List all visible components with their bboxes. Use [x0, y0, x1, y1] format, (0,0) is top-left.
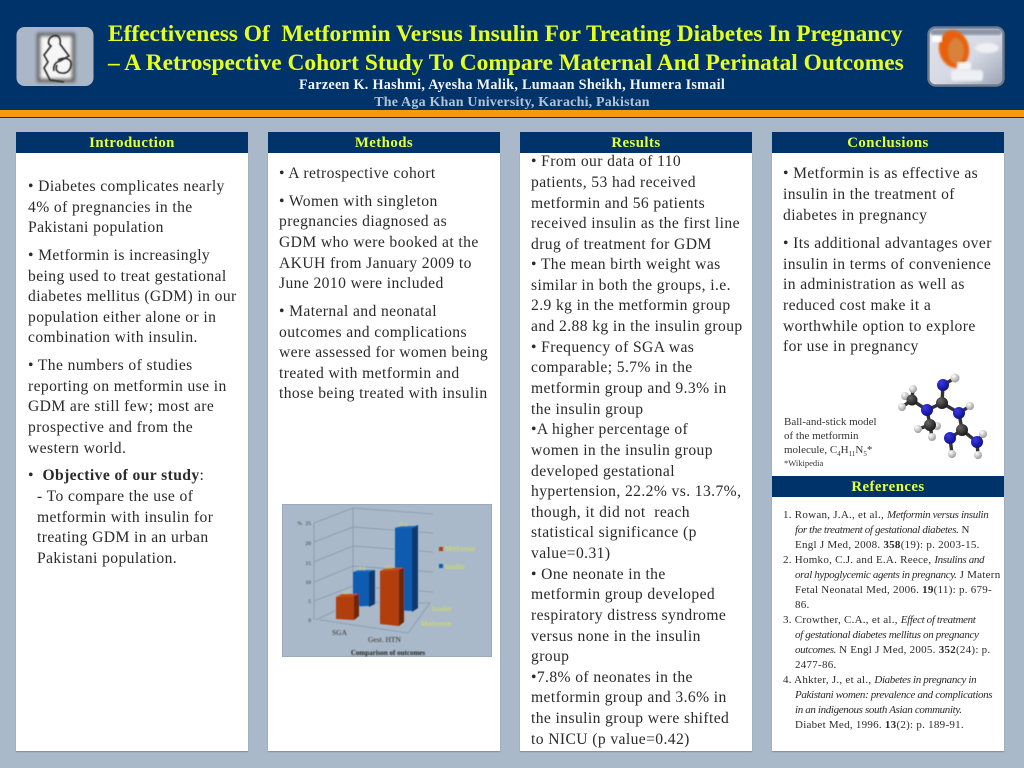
results text: women in the insulin group [531, 442, 713, 459]
methods text: were assessed for women being [279, 344, 488, 361]
introduction text: treating GDM in an urban [37, 529, 209, 546]
category labels: Gest. HTN [368, 635, 401, 644]
bar chart: comparison of outcomes [282, 504, 492, 657]
orange rule [0, 110, 1024, 117]
conclusions text: worthwhile option to explore [783, 318, 976, 335]
introduction heading: Introduction [89, 135, 175, 151]
references list: 3. Crowther, C.A., et al., Effect of treatment [783, 614, 975, 626]
introduction text: • Objective of our study: [28, 467, 204, 484]
references list: 4. Ahkter, J., et al., Diabetes in pregnancy in [783, 674, 976, 686]
references list: outcomes. N Engl J Med, 2005. 352(24): p. [795, 644, 990, 656]
value labels [343, 523, 408, 596]
introduction text: • The numbers of studies [28, 357, 193, 374]
introduction text: metformin with insulin for [37, 508, 213, 526]
introduction text: being used to treat gestational [28, 268, 227, 284]
results text: and 2.88 kg in the insulin group [531, 318, 743, 335]
introduction text: prospective and from the [28, 419, 193, 436]
panel: results [520, 132, 752, 752]
introduction text: diabetes mellitus (GDM) in our [28, 288, 237, 305]
results heading: Results [611, 135, 661, 151]
results text: the insulin group [531, 401, 643, 418]
title: Effectiveness Of Metformin Versus Insulin For Treating Diabetes In Pregnancy [108, 21, 902, 47]
results text: respiratory distress syndrome [531, 607, 726, 624]
legend: Insulin [445, 563, 465, 571]
results text: metformin group and 9.3% in [531, 380, 727, 397]
introduction text: reporting on metformin use in [28, 378, 227, 394]
axis labels: 5 [308, 599, 311, 605]
references body [772, 497, 1004, 751]
results text: 2.9 kg in the metformin group [531, 297, 731, 314]
references list [783, 509, 1000, 731]
results text: group [531, 648, 569, 665]
methods text: pregnancies diagnosed as [279, 213, 447, 230]
conclusions text [783, 165, 992, 355]
references list: 2. Homko, C.J. and E.A. Reece, Insulins and [783, 554, 984, 566]
legend: Metformin [421, 620, 452, 628]
molecule caption [784, 416, 877, 468]
methods text: • A retrospective cohort [279, 165, 436, 182]
introduction text: combination with insulin. [28, 329, 198, 346]
introduction body [16, 153, 248, 751]
icon: pill bottle [927, 26, 1005, 87]
results text: drug of treatment for GDM [531, 236, 712, 253]
value labels: 22.2 [399, 523, 408, 528]
axis labels: % [297, 521, 302, 527]
results text: metformin and 56 patients [531, 195, 705, 212]
header band [0, 0, 1024, 118]
methods text: • Women with singleton [279, 192, 438, 210]
methods body [268, 153, 500, 751]
results text: comparable; 5.7% in the [531, 359, 693, 376]
introduction text: - To compare the use of [37, 488, 193, 505]
references list: 2477-86. [795, 659, 836, 671]
results text: metformin group developed [531, 586, 715, 603]
panel: methods [268, 132, 500, 752]
methods text: • Maternal and neonatal [279, 303, 437, 320]
panel: conclusions [772, 132, 1004, 477]
introduction text: GDM are still few; most are [28, 398, 214, 415]
introduction text: Pakistani population. [37, 550, 177, 566]
introduction text: western world. [28, 440, 126, 456]
results text: though, it did not reach [531, 504, 690, 521]
results text: received insulin as the first line [531, 215, 740, 232]
axis labels [297, 521, 311, 624]
results text: •7.8% of neonates in the [531, 669, 693, 686]
introduction heading [16, 132, 248, 153]
references list: 86. [795, 599, 810, 611]
introduction text: • Diabetes complicates nearly [28, 178, 225, 195]
molecule caption: molecule, C4H11N5* [784, 444, 872, 459]
results text: • Frequency of SGA was [531, 339, 694, 356]
results text: hypertension, 22.2% vs. 13.7%, [531, 483, 741, 500]
conclusions text: insulin in the treatment of [783, 186, 955, 203]
methods text: outcomes and complications [279, 324, 467, 340]
chart title: Comparison of outcomes [351, 649, 425, 657]
introduction text: • Metformin is increasingly [28, 247, 210, 264]
references list: Diabet Med, 1996. 13(2): p. 189-91. [795, 719, 964, 731]
value labels: 9.3 [359, 567, 366, 572]
results text: statistical significance (p [531, 524, 697, 541]
panel: references [772, 476, 1004, 752]
introduction text: population either alone or in [28, 308, 216, 326]
conclusions text: in administration as well as [783, 276, 965, 293]
icon: mother and child [16, 27, 94, 86]
results text: similar in both the groups, i.e. [531, 277, 731, 294]
icon: metformin molecule [898, 374, 987, 459]
axis labels: 15 [306, 561, 311, 567]
molecule caption: *Wikipedia [784, 458, 823, 468]
conclusions heading [772, 132, 1004, 153]
results text: • The mean birth weight was [531, 256, 721, 273]
authors: Farzeen K. Hashmi, Ayesha Malik, Lumaan Sheikh, Humera Ismail [299, 77, 725, 93]
methods text: GDM who were booked at the [279, 234, 479, 251]
methods heading [268, 132, 500, 153]
references list: 1. Rowan, J.A., et al., Metformin versus insulin [783, 509, 988, 521]
results text: versus none in the insulin [531, 628, 701, 645]
results text: developed gestational [531, 463, 675, 480]
title: – A Retrospective Cohort Study To Compare Maternal And Perinatal Outcomes [108, 50, 904, 76]
value labels: 13.7 [385, 566, 394, 571]
metformin bars [336, 567, 404, 626]
molecule caption: of the metformin [784, 430, 859, 442]
conclusions heading: Conclusions [847, 135, 929, 151]
results text: to NICU (p value=0.42) [531, 731, 690, 748]
results body [520, 153, 752, 751]
references list: in an indigenous south Asian community. [795, 704, 962, 716]
methods text: June 2010 were included [279, 275, 444, 292]
introduction text [28, 178, 237, 566]
conclusions text: • Its additional advantages over [783, 235, 992, 252]
axis labels: 20 [306, 541, 311, 547]
molecule caption: Ball-and-stick model [784, 416, 877, 428]
introduction text: Pakistani population [28, 219, 164, 236]
references heading [772, 476, 1004, 497]
results text: the insulin group were shifted [531, 710, 729, 727]
results text [531, 153, 743, 748]
axis labels: 10 [306, 580, 311, 586]
legend [421, 545, 476, 628]
conclusions text: diabetes in pregnancy [783, 207, 927, 224]
results text: •A higher percentage of [531, 421, 688, 438]
axis labels: 0 [308, 618, 311, 624]
references heading: References [851, 479, 925, 495]
methods heading: Methods [355, 135, 413, 151]
conclusions text: • Metformin is as effective as [783, 165, 978, 182]
methods text: AKUH from January 2009 to [279, 254, 472, 272]
results text: value=0.31) [531, 545, 610, 562]
results heading [520, 132, 752, 153]
references list: Pakistani women: prevalence and complications [795, 689, 992, 701]
references list: for the treatment of gestational diabetes. N [795, 524, 970, 536]
affiliation: The Aga Khan University, Karachi, Pakistan [374, 95, 650, 110]
panel: introduction [16, 132, 248, 752]
conclusions text: insulin in terms of convenience [783, 256, 991, 273]
methods text: those being treated with insulin [279, 385, 488, 402]
category labels [332, 628, 401, 644]
results text: metformin group and 3.6% in [531, 689, 727, 706]
category labels: SGA [332, 628, 348, 637]
results text: patients, 53 had received [531, 174, 696, 191]
conclusions text: for use in pregnancy [783, 338, 919, 355]
introduction text: 4% of pregnancies in the [28, 198, 193, 216]
methods text [279, 165, 488, 402]
conclusions body [772, 153, 1004, 476]
legend: Insulin [432, 605, 452, 613]
axis labels: 25 [306, 521, 311, 527]
results text: • From our data of 110 [531, 153, 681, 170]
references list: Fetal Neonatal Med, 2006. 19(11): p. 679- [795, 584, 992, 596]
legend: Metformin [445, 545, 476, 553]
insulin bars [353, 525, 418, 612]
references list: of gestational diabetes mellitus on pregnancy [795, 629, 979, 641]
title [108, 21, 904, 76]
value labels: 5.7 [343, 591, 350, 596]
methods text: treated with metformin and [279, 364, 460, 382]
conclusions text: reduced cost make it a [783, 297, 931, 314]
references list: Engl J Med, 2008. 358(19): p. 2003-15. [795, 539, 980, 551]
references list: oral hypoglycemic agents in pregnancy. J Matern [795, 569, 1000, 581]
results text: • One neonate in the [531, 566, 666, 583]
